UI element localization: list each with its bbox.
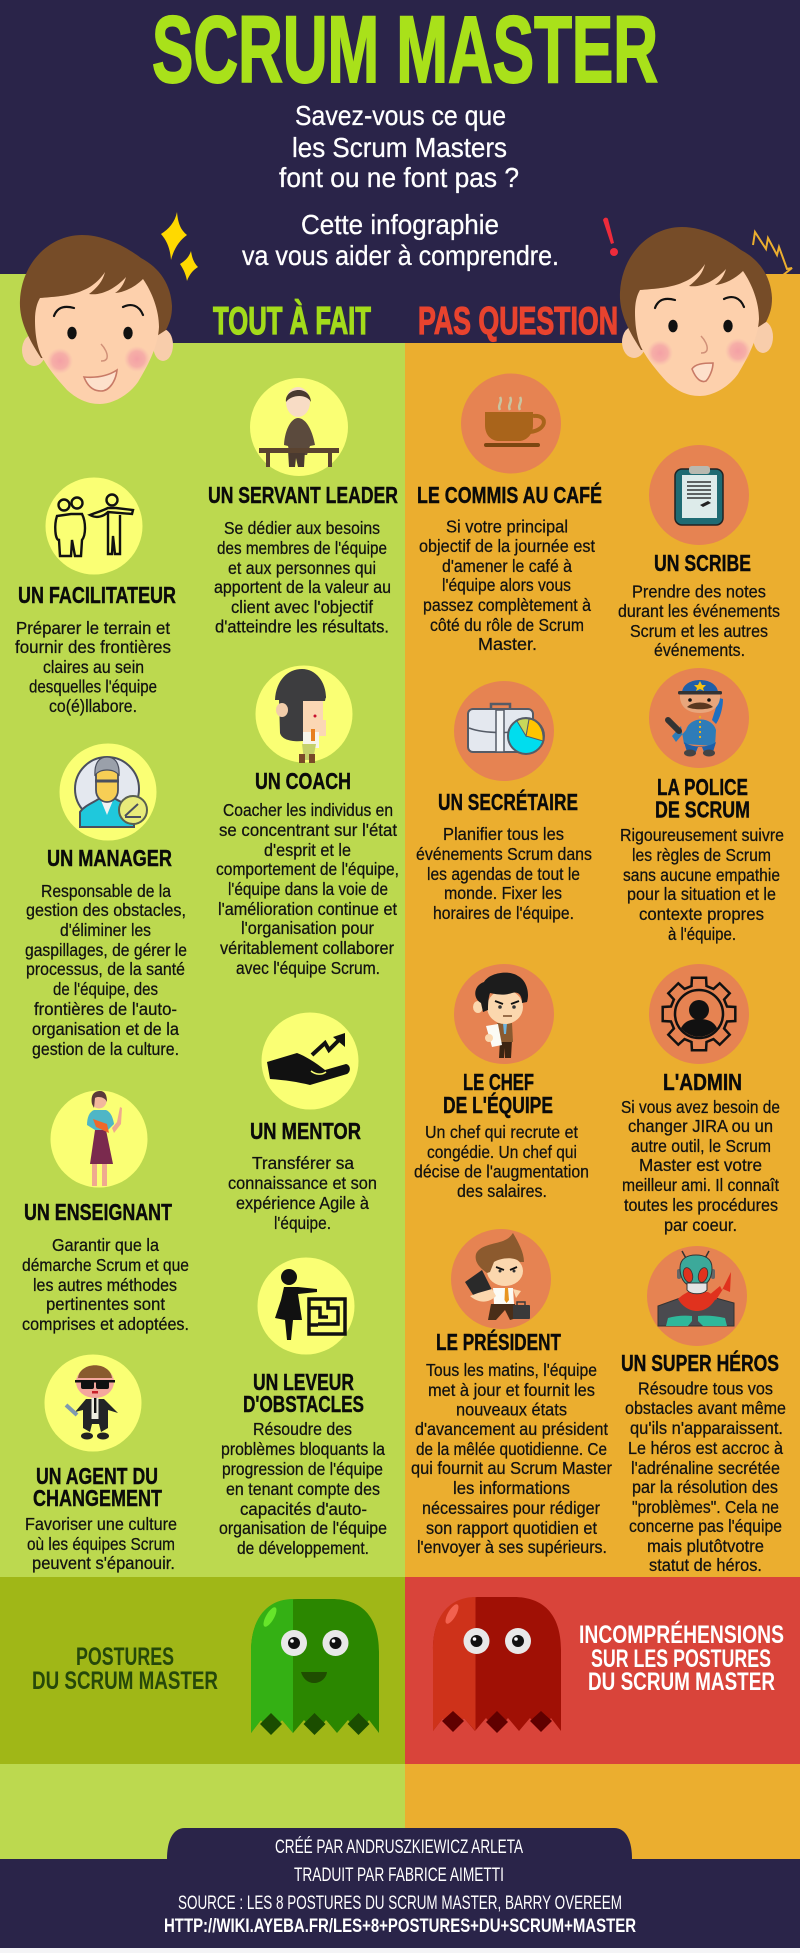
text block: de développement. <box>237 1538 369 1558</box>
text block: fournir des frontières <box>15 637 171 657</box>
intro question: font ou ne font pas ? <box>279 162 519 193</box>
text block: Résoudre des <box>253 1419 352 1439</box>
panel: l'admin <box>621 964 780 1235</box>
legend label: POSTURES <box>76 1643 174 1671</box>
intro statement: va vous aider à comprendre. <box>242 240 559 271</box>
text block: de la mêlée quotidienne. Ce <box>416 1439 607 1459</box>
text block: l'adrénaline secrétée <box>631 1458 780 1478</box>
panel: un scribe <box>618 445 780 660</box>
text block: co(é)llabore. <box>49 696 137 716</box>
text block <box>22 1235 189 1334</box>
text block: et aux personnes qui <box>228 558 376 578</box>
panel: la police de scrum <box>620 668 784 944</box>
text block: par coeur. <box>664 1215 737 1235</box>
heading: DE SCRUM <box>655 796 750 822</box>
credits: CRÉÉ PAR ANDRUSZKIEWICZ ARLETA <box>275 1837 523 1858</box>
panel: le commis au café <box>417 374 602 654</box>
text block <box>414 1122 589 1201</box>
text block: l'équipe alors vous <box>442 575 571 595</box>
text block: comprises et adoptées. <box>22 1314 189 1334</box>
text block: véritablement collaborer <box>220 938 394 958</box>
text block: apportent de la valeur au <box>214 577 391 597</box>
text block: par la résolution des <box>632 1477 778 1497</box>
text block: d'éliminer les <box>60 920 151 940</box>
text block: connaissance et son <box>228 1173 377 1193</box>
text block: progression de l'équipe <box>222 1459 383 1479</box>
text block: Master. <box>478 634 537 654</box>
text block: d'avancement au président <box>415 1419 608 1439</box>
text block: passez complètement à <box>423 595 591 615</box>
text block: organisation et de la <box>32 1019 179 1039</box>
text block: claires au sein <box>43 657 144 677</box>
intro statement <box>242 209 559 271</box>
heading: DE L'ÉQUIPE <box>443 1091 553 1118</box>
icon: masked super hero <box>647 1246 747 1346</box>
heading: UN ENSEIGNANT <box>24 1199 172 1225</box>
text block: Favoriser une culture <box>25 1514 177 1534</box>
panel: legend green <box>0 1577 405 1764</box>
heading: UN SCRIBE <box>654 550 751 576</box>
icon: gear with user <box>649 964 749 1064</box>
icon: manager with glasses <box>60 744 156 840</box>
icon: coffee cup <box>461 374 561 474</box>
text block: monde. Fixer les <box>444 883 562 903</box>
text block <box>214 518 391 636</box>
heading: UN LEVEUR <box>253 1369 354 1395</box>
icon: coach girl <box>256 666 352 763</box>
text block: d'esprit et le <box>264 840 351 860</box>
text block: Si votre principal <box>446 516 568 536</box>
text block: horaires de l'équipe. <box>433 903 574 923</box>
text block: pour la situation et le <box>627 884 776 904</box>
icon: person and maze <box>258 1258 354 1354</box>
text block: d'atteindre les résultats. <box>215 616 389 636</box>
text block: toutes les procédures <box>624 1195 778 1215</box>
text block: de l'équipe, des <box>53 979 158 999</box>
text block: qui fournit au Scrum Master <box>411 1458 612 1478</box>
text block: d'amener le café à <box>442 556 572 576</box>
text block: gestion des obstacles, <box>26 900 186 920</box>
icon: clipboard <box>649 445 749 545</box>
text block: Planifier tous les <box>443 824 564 844</box>
credits: HTTP://WIKI.AYEBA.FR/LES+8+POSTURES+DU+SCRUM+MASTER <box>164 1916 636 1937</box>
panel: legend red <box>405 1577 800 1764</box>
text block <box>416 824 592 923</box>
text block: Si vous avez besoin de <box>621 1097 780 1117</box>
text block: Se dédier aux besoins <box>224 518 380 538</box>
credits: SOURCE : LES 8 POSTURES DU SCRUM MASTER, BARRY OVEREEM <box>178 1893 622 1914</box>
icon: green ghost <box>251 1599 379 1735</box>
icon: team boss <box>454 964 554 1064</box>
text block <box>411 1360 612 1557</box>
text block <box>216 800 399 978</box>
panel: un secrétaire <box>416 681 592 923</box>
icon: teacher <box>50 1090 148 1188</box>
character: happy face <box>20 235 173 404</box>
text block: met à jour et fournit les <box>428 1380 595 1400</box>
intro question: les Scrum Masters <box>292 132 507 163</box>
icon: police officer <box>649 668 749 768</box>
text block: en tenant compte des <box>226 1479 380 1499</box>
text block: événements. <box>654 640 745 660</box>
text block: Rigoureusement suivre <box>620 825 784 845</box>
heading: pas question: PAS QUESTION <box>418 300 618 343</box>
heading: LA POLICE <box>657 774 748 800</box>
panel: un agent du changement <box>25 1354 177 1573</box>
text block: organisation de l'équipe <box>219 1518 387 1538</box>
text block: client avec l'objectif <box>231 597 373 617</box>
icon: hand with rising arrow <box>262 1012 358 1110</box>
intro question: Savez-vous ce que <box>295 100 506 131</box>
text block: peuvent s'épanouir. <box>32 1553 175 1573</box>
text block <box>419 516 595 654</box>
text block: les agendas de tout le <box>427 864 580 884</box>
panel: un coach <box>216 666 399 978</box>
text block: contexte propres <box>639 904 764 924</box>
text block: obstacles avant même <box>625 1398 786 1418</box>
legend label <box>579 1620 784 1696</box>
icon: president with phone <box>451 1229 551 1329</box>
text block: expérience Agile à <box>236 1193 369 1213</box>
text block: les règles de Scrum <box>632 845 771 865</box>
text block <box>620 825 784 944</box>
panel: le président <box>411 1229 612 1557</box>
heading: UN COACH <box>255 768 351 794</box>
icon: zigzag <box>753 232 795 280</box>
text block: Le héros est accroc à <box>628 1438 783 1458</box>
panel: un enseignant <box>22 1090 189 1334</box>
text block: Garantir que la <box>52 1235 159 1255</box>
text block: frontières de l'auto- <box>34 999 177 1019</box>
text block: nécessaires pour rédiger <box>422 1498 600 1518</box>
text block: Master est votre <box>639 1155 762 1175</box>
icon: agent with sunglasses <box>44 1354 142 1452</box>
text block: changer JIRA ou un <box>628 1116 773 1136</box>
text block: Résoudre tous vos <box>638 1378 773 1398</box>
header <box>20 0 795 404</box>
text block: les informations <box>453 1478 570 1498</box>
text block: où les équipes Scrum <box>27 1534 175 1554</box>
text block: mais plutôtvotre <box>647 1536 764 1556</box>
heading: UN SERVANT LEADER <box>208 482 398 508</box>
text block: durant les événements <box>618 601 780 621</box>
text block: Responsable de la <box>41 881 171 901</box>
text block: objectif de la journée est <box>419 536 595 556</box>
text block: qu'ils n'apparaissent. <box>630 1418 783 1438</box>
text block: gaspillages, de gérer le <box>25 940 187 960</box>
text block: concerne pas l'équipe <box>629 1516 782 1536</box>
text block: l'équipe. <box>274 1213 331 1233</box>
icon: exclamation mark <box>603 218 618 256</box>
heading: L'ADMIN <box>663 1069 742 1095</box>
text block <box>25 881 187 1059</box>
heading: UN AGENT DU <box>36 1463 158 1489</box>
icon: servant on a bench <box>250 378 348 476</box>
intro statement: Cette infographie <box>301 209 499 240</box>
text block: se concentrant sur l'état <box>219 820 397 840</box>
text block: problèmes bloquants la <box>221 1439 385 1459</box>
icon: sparkles <box>161 212 198 281</box>
heading: LE COMMIS AU CAFÉ <box>417 481 602 508</box>
icon: facilitator group <box>46 478 142 574</box>
text block: gestion de la culture. <box>32 1039 179 1059</box>
text block: démarche Scrum et que <box>22 1255 189 1275</box>
intro question <box>279 100 519 193</box>
text block: Un chef qui recrute et <box>425 1122 578 1142</box>
text block: événements Scrum dans <box>416 844 592 864</box>
heading: LE CHEF <box>463 1069 534 1095</box>
text block: des membres de l'équipe <box>217 538 387 558</box>
text block: les autres méthodes <box>33 1275 177 1295</box>
text block: Préparer le terrain et <box>16 618 170 638</box>
heading: UN MENTOR <box>250 1118 361 1144</box>
text block: Coacher les individus en <box>223 800 393 820</box>
panel: un mentor <box>228 1012 377 1233</box>
text block: meilleur ami. Il connaît <box>622 1175 779 1195</box>
heading: UN FACILITATEUR <box>18 582 176 608</box>
text block: autre outil, le Scrum <box>631 1136 771 1156</box>
text block: l'équipe dans la voie de <box>228 879 388 899</box>
credits: TRADUIT PAR FABRICE AIMETTI <box>294 1865 504 1886</box>
text block <box>618 582 780 660</box>
text block: à l'équipe. <box>668 924 736 944</box>
panel: un leveur d'obstacles <box>219 1258 387 1558</box>
text block <box>219 1419 387 1558</box>
panel: un manager <box>25 744 187 1059</box>
text block: processus, de la santé <box>26 959 185 979</box>
heading <box>33 1463 162 1511</box>
text block: l'organisation pour <box>241 918 374 938</box>
text block: Transférer sa <box>252 1153 354 1173</box>
text block: pertinentes sont <box>46 1294 165 1314</box>
text block: "problèmes". Cela ne <box>632 1497 779 1517</box>
icon: briefcase and pie chart <box>454 681 554 781</box>
text block: Tous les matins, l'équipe <box>426 1360 597 1380</box>
text block: desquelles l'équipe <box>29 676 157 696</box>
text block: avec l'équipe Scrum. <box>236 958 380 978</box>
text block <box>15 618 171 716</box>
text block: l'amélioration continue et <box>218 899 397 919</box>
heading <box>655 774 750 822</box>
text block: comportement de l'équipe, <box>216 859 399 879</box>
text block: l'envoyer à ses supérieurs. <box>417 1537 607 1557</box>
heading: LE PRÉSIDENT <box>436 1328 561 1355</box>
text block <box>625 1378 786 1575</box>
icon: red ghost <box>433 1597 561 1733</box>
panel: le chef de l'équipe <box>414 964 589 1201</box>
heading: CHANGEMENT <box>33 1485 162 1511</box>
footer <box>0 1828 800 1953</box>
text block <box>25 1514 177 1573</box>
text block: nouveaux états <box>456 1400 567 1420</box>
text block: capacités d'auto- <box>240 1499 367 1519</box>
legend label: DU SCRUM MASTER <box>32 1667 218 1695</box>
heading <box>243 1369 364 1417</box>
text block: Scrum et les autres <box>630 621 768 641</box>
text block <box>228 1153 377 1233</box>
credits <box>164 1837 636 1937</box>
text block: son rapport quotidien et <box>426 1518 597 1538</box>
heading <box>443 1069 553 1118</box>
legend label <box>32 1643 218 1695</box>
text block: côté du rôle de Scrum <box>430 615 584 635</box>
text block: statut de héros. <box>649 1555 762 1575</box>
panel: un super héros <box>621 1246 786 1575</box>
text block: Prendre des notes <box>632 582 766 602</box>
heading: UN SECRÉTAIRE <box>438 788 578 815</box>
heading: D'OBSTACLES <box>243 1391 364 1417</box>
character: surprised face <box>620 227 773 396</box>
text block <box>621 1097 780 1235</box>
text block: sans aucune empathie <box>623 865 780 885</box>
panel: un facilitateur <box>15 478 176 716</box>
text block: congédie. Un chef qui <box>427 1142 577 1162</box>
heading: UN MANAGER <box>47 845 172 871</box>
panel: un servant leader <box>208 378 398 636</box>
heading: tout à fait: TOUT À FAIT <box>213 299 371 343</box>
text block: des salaires. <box>457 1181 547 1201</box>
text block: décise de l'augmentation <box>414 1162 589 1182</box>
